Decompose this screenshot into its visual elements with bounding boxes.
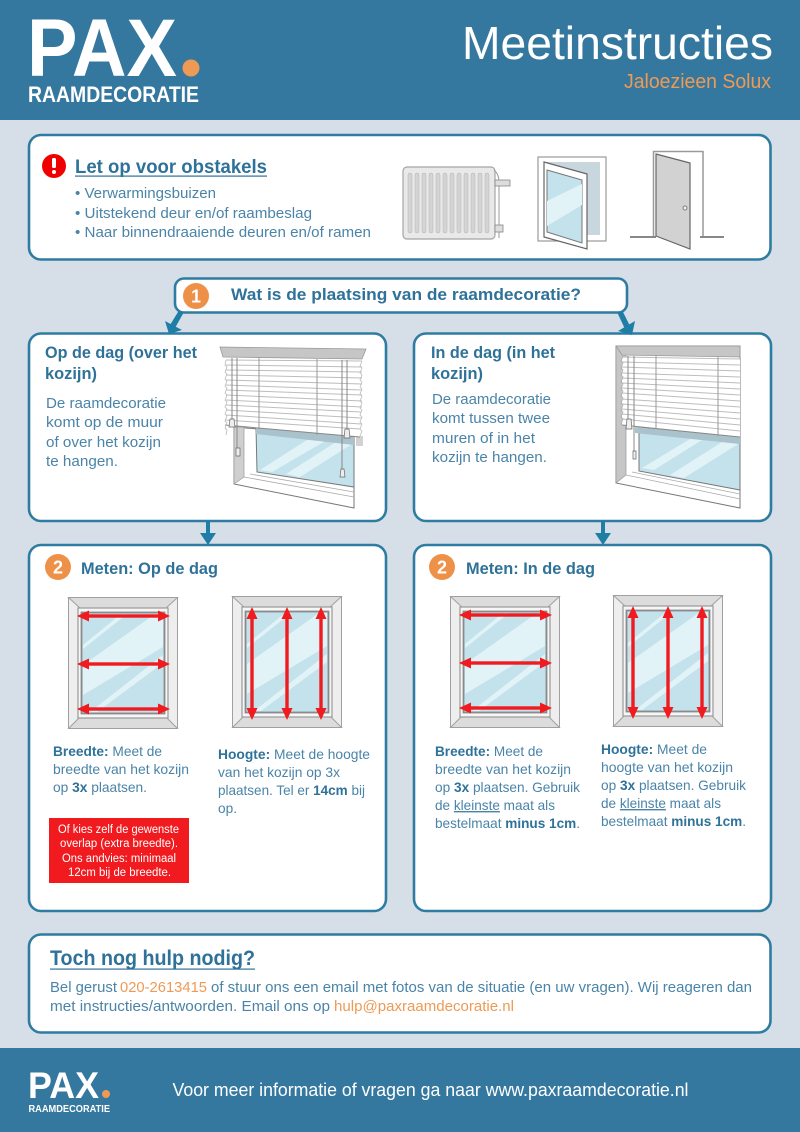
heading: kozijn) — [431, 364, 483, 383]
text: hoogte: bestelmaat minus 1cm. — [601, 813, 746, 829]
text: hoogte: de kleinste maat als — [601, 795, 721, 811]
help text: met instructies/antwoorden. Email ons op — [50, 999, 330, 1015]
window: width arrows — [450, 596, 560, 728]
window: height arrows — [232, 596, 342, 728]
text: hoogte: Hoogte: Meet de hoogte — [218, 746, 370, 762]
header band — [0, 0, 800, 120]
text: breedte: Breedte: Meet de — [53, 743, 162, 759]
panel: meten op de dag — [29, 545, 386, 911]
obstacle list — [75, 186, 371, 241]
question text: Wat is de plaatsing van de raamdecoratie? — [231, 285, 581, 304]
description: komt op de muur — [46, 415, 163, 431]
text: breedte: breedte van het kozijn — [435, 761, 571, 777]
arrow: right panel to measuring — [595, 521, 611, 545]
description: muren of in het — [432, 431, 535, 447]
subtitle: Jaloezieen Solux — [624, 71, 771, 93]
footer text: Voor meer informatie of vragen ga naar www.paxraamdecoratie.nl — [172, 1080, 688, 1100]
footer logo: PAX — [28, 1065, 99, 1106]
badge: 2: 2 — [53, 558, 63, 578]
footer band — [0, 1048, 800, 1132]
obstacle list: • Verwarmingsbuizen — [75, 186, 216, 202]
description — [46, 396, 166, 470]
text: breedte: breedte van het kozijn — [53, 761, 189, 777]
obstacle list: • Naar binnendraaiende deuren en/of ramen — [75, 225, 371, 241]
text: hoogte — [218, 746, 370, 816]
badge: 2 — [429, 554, 455, 580]
text: breedte: bestelmaat minus 1cm. — [435, 815, 580, 831]
heading — [431, 343, 555, 383]
text: breedte: Breedte: Meet de — [435, 743, 543, 759]
text: breedte: op 3x plaatsen. Gebruik — [435, 779, 581, 795]
panel: op de dag — [29, 334, 386, 521]
callout: overlap advice: Of kies zelf de gewenste — [58, 824, 179, 836]
text: breedte: de kleinste maat als — [435, 797, 555, 813]
heading: Toch nog hulp nodig? — [50, 947, 255, 970]
text: breedte — [53, 743, 189, 795]
arrow: left panel to measuring — [200, 521, 216, 545]
icon: radiator — [403, 167, 510, 239]
panel: obstakels — [29, 135, 770, 260]
window: height arrows — [614, 596, 722, 726]
help text: Bel gerust — [50, 980, 117, 996]
description: komt tussen twee — [432, 411, 550, 427]
text: hoogte: op 3x plaatsen. Gebruik — [601, 777, 747, 793]
arrow: step 1 to right — [617, 312, 635, 335]
heading — [45, 343, 197, 383]
badge: 2 — [45, 554, 71, 580]
text: hoogte: hoogte van het kozijn — [601, 759, 733, 775]
help text: hulp@paxraamdecoratie.nl — [334, 999, 514, 1015]
panel: meten in de dag — [414, 545, 771, 911]
footer logo: RAAMDECORATIE — [28, 1104, 110, 1115]
description: De raamdecoratie — [432, 392, 551, 408]
icon: inward opening window — [538, 157, 606, 249]
icon: inward opening door — [630, 152, 724, 249]
obstacle list: • Uitstekend deur en/of raambeslag — [75, 206, 312, 222]
heading: Op de dag (over het — [45, 343, 197, 362]
heading: In de dag (in het — [431, 343, 555, 362]
heading: Meten: In de dag — [466, 559, 595, 578]
question box: step 1 — [175, 278, 627, 312]
callout: overlap advice: overlap (extra breedte). — [60, 838, 178, 850]
description: kozijn te hangen. — [432, 450, 547, 466]
help text — [50, 980, 752, 1015]
badge: 1: 1 — [191, 286, 201, 306]
callout: overlap advice — [49, 818, 189, 883]
panel: hulp — [29, 934, 770, 1032]
description: te hangen. — [46, 454, 118, 470]
arrow: step 1 to left — [165, 312, 184, 334]
text: hoogte — [601, 741, 747, 829]
title: Meetinstructies — [462, 17, 773, 69]
badge: 1 — [183, 283, 209, 309]
badge: 2: 2 — [437, 558, 447, 578]
illustration: blind in frame — [616, 346, 740, 508]
heading: kozijn) — [45, 364, 97, 383]
text: hoogte: plaatsen. Tel er 14cm bij — [218, 782, 365, 798]
callout: overlap advice: Ons andvies: minimaal — [62, 853, 176, 865]
callout: overlap advice: 12cm bij de breedte. — [68, 867, 171, 879]
text: hoogte: Hoogte: Meet de — [601, 741, 707, 757]
illustration: blind on wall — [220, 347, 366, 508]
text: hoogte: op. — [218, 800, 237, 816]
help text: 020-2613415 — [120, 980, 207, 996]
icon: warning — [42, 154, 66, 178]
logo: PAX raamdecoratie: RAAMDECORATIE — [28, 82, 199, 107]
logo: PAX raamdecoratie: PAX — [27, 3, 177, 94]
description: of over het kozijn — [46, 435, 161, 451]
help text: of stuur ons een email met fotos van de situatie (en uw vragen). Wij reageren dan — [211, 980, 752, 996]
heading: let op: Let op voor obstakels — [75, 157, 267, 178]
text: breedte — [435, 743, 581, 831]
description — [432, 392, 551, 466]
heading: Meten: Op de dag — [81, 559, 218, 578]
text: breedte: op 3x plaatsen. — [53, 779, 147, 795]
description: De raamdecoratie — [46, 396, 166, 412]
window: width arrows — [68, 598, 178, 728]
panel: in de dag — [414, 334, 771, 521]
text: hoogte: van het kozijn op 3x — [218, 764, 340, 780]
